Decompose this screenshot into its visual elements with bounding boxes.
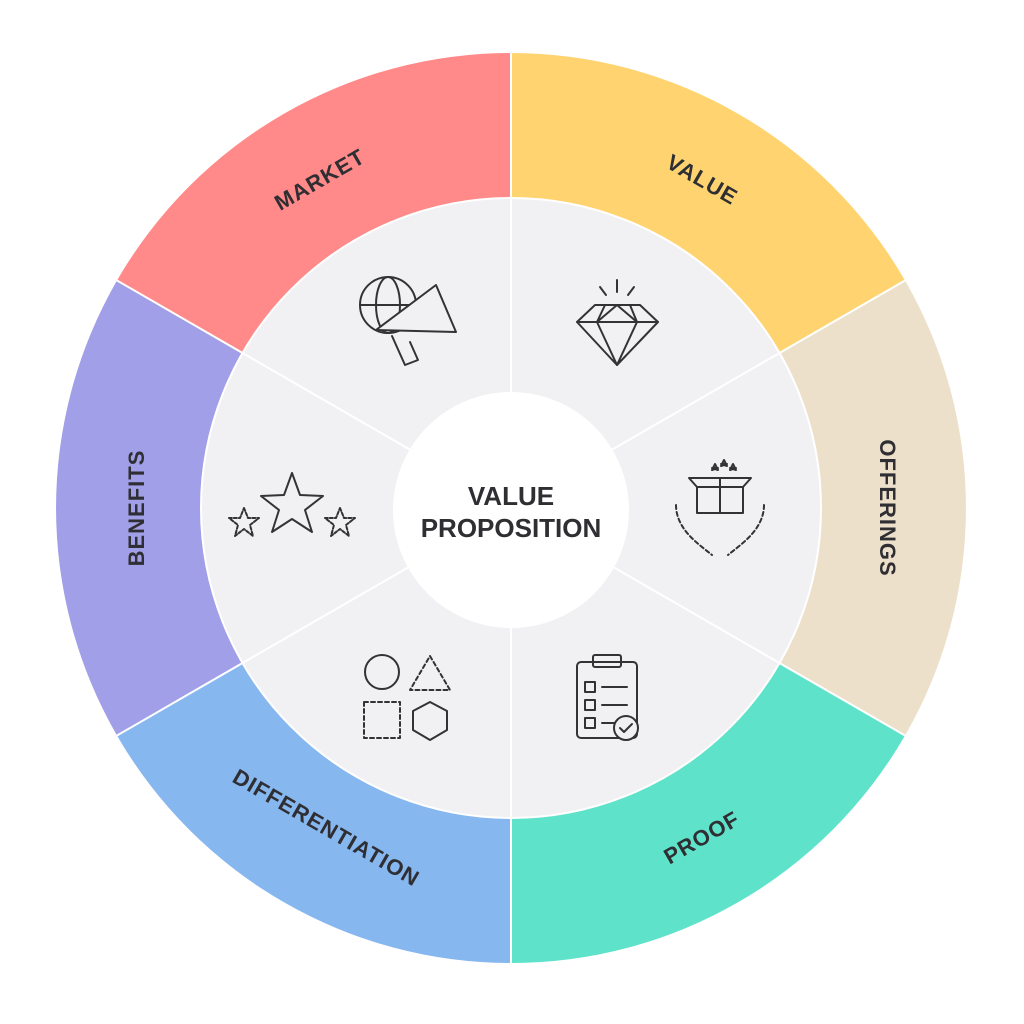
icon: diamond: [577, 280, 658, 365]
label: offerings: OFFERINGS: [875, 439, 900, 577]
label: market: MARKET: [270, 144, 369, 215]
segment: value: [511, 53, 905, 508]
segment: offerings: [511, 280, 966, 736]
icon: gift box in hands: [676, 460, 764, 555]
label: differentiation: DIFFERENTIATION: [228, 764, 424, 891]
center title: PROPOSITION: [421, 513, 601, 543]
segment: benefits: [56, 280, 511, 736]
center circle: [393, 392, 629, 628]
icon: stars: [229, 473, 355, 536]
wheel: [56, 53, 966, 963]
center title: [421, 481, 601, 543]
label: value: VALUE: [662, 149, 742, 210]
inner ring: [201, 198, 821, 818]
center title: VALUE: [468, 481, 554, 511]
segment: proof: [511, 508, 905, 963]
label: benefits: BENEFITS: [124, 450, 149, 566]
segment: differentiation: [117, 508, 511, 963]
icon: shapes: [364, 655, 450, 740]
segment: market: [117, 53, 511, 508]
icon: globe megaphone: [360, 277, 456, 365]
label: proof: PROOF: [659, 806, 744, 869]
icon: clipboard: [577, 655, 638, 740]
